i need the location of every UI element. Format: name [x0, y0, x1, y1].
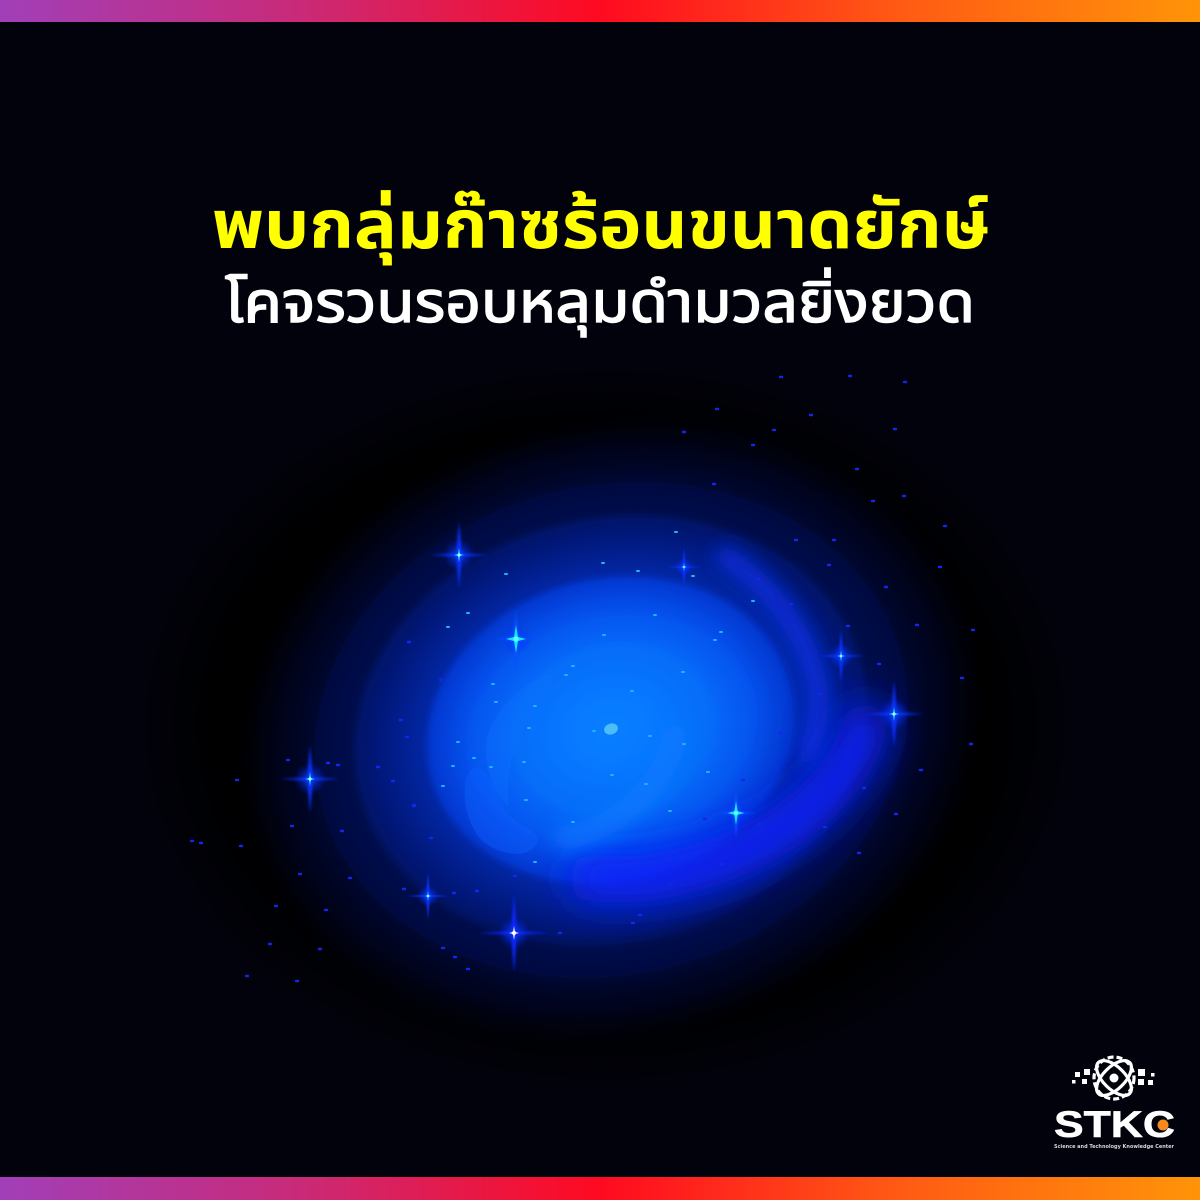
bright star	[429, 521, 489, 589]
small stars: inner field	[442, 532, 754, 862]
bright star	[478, 893, 550, 973]
small stars: outer field	[191, 376, 974, 981]
bright star	[864, 680, 924, 748]
title line 2: โคจรวนรอบหลุมดำมวลยิ่งยวด	[225, 267, 975, 337]
wordmark: STKC	[1054, 1104, 1175, 1145]
top gradient bar	[0, 0, 1200, 22]
gas cloud: upper left	[486, 673, 552, 807]
translucent bands	[312, 465, 910, 991]
bottom gradient bar	[0, 1177, 1200, 1200]
bright star	[716, 788, 756, 838]
bright star	[666, 547, 702, 587]
spiral arm: upper right	[725, 556, 819, 754]
icon: atom	[1091, 1055, 1137, 1101]
logo: STKC	[1054, 1055, 1175, 1150]
tagline: Science and Technology Knowledge Center	[1054, 1144, 1174, 1150]
light streak lower right of core	[565, 736, 674, 838]
icon: pixel squares	[1072, 1069, 1154, 1085]
galactic core	[603, 722, 619, 736]
bright star	[817, 629, 865, 683]
spiral arm: lower right	[590, 725, 866, 880]
title line 1: พบกลุ่มก๊าซร้อนขนาดยักษ์	[212, 187, 990, 266]
icon: orange dot	[1158, 1120, 1168, 1130]
bright star	[280, 745, 340, 813]
bright star	[492, 609, 540, 669]
galaxy illustration	[125, 331, 1085, 1129]
bright star	[407, 872, 449, 920]
gas cloud: lower left	[465, 767, 538, 854]
